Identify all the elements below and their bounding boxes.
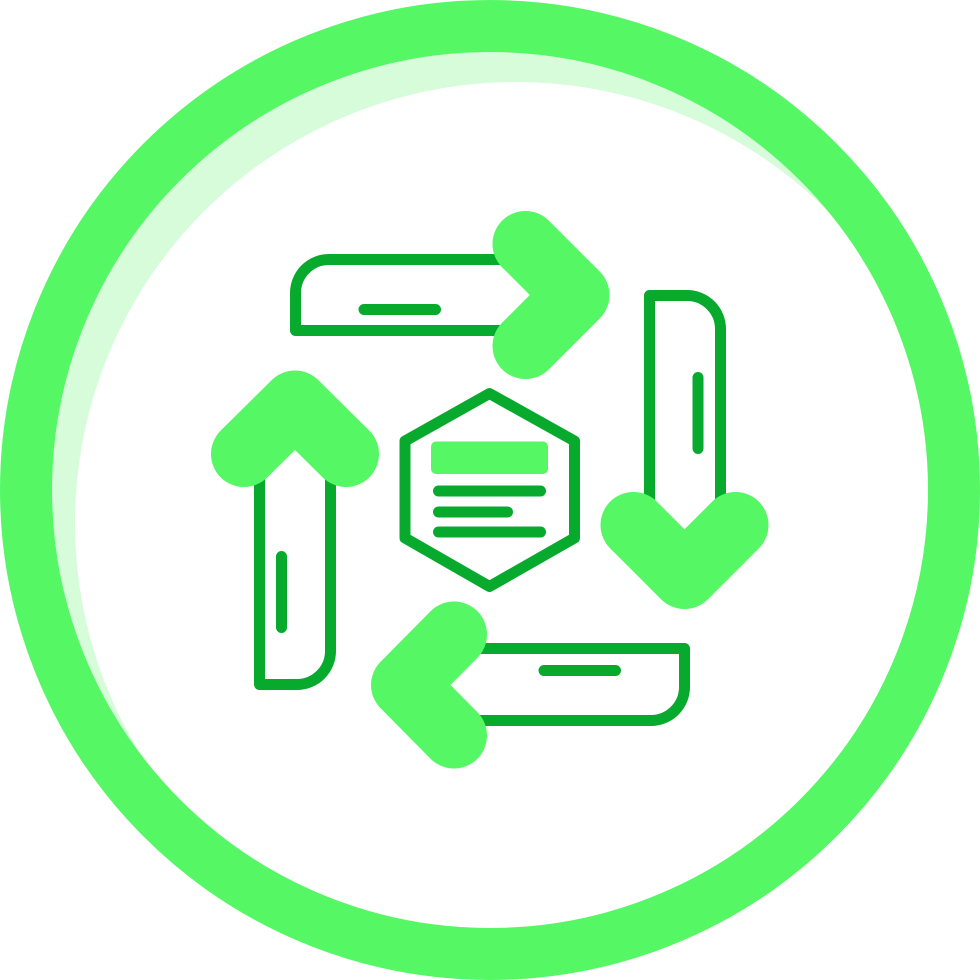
arrow head — [244, 404, 346, 454]
arrow: right pointing down — [634, 296, 736, 576]
arrow head — [526, 244, 576, 346]
arrow body detail line — [276, 556, 287, 628]
arrow body detail line — [692, 378, 704, 448]
arrow: left pointing up — [244, 404, 346, 684]
arrow head — [634, 525, 736, 576]
document text lines — [438, 491, 540, 532]
arrow head — [404, 634, 454, 736]
arrow: bottom pointing left — [404, 634, 684, 736]
arrow body detail line — [544, 665, 616, 676]
document header block — [431, 442, 548, 474]
arrow body — [650, 296, 720, 510]
arrow body — [260, 470, 330, 684]
arrow body detail line — [364, 304, 436, 315]
central hexagon document — [405, 394, 574, 586]
arrow body — [296, 260, 520, 330]
hexagon outline — [405, 394, 574, 586]
arrow: top pointing right — [296, 244, 576, 346]
arrow body — [460, 648, 684, 720]
